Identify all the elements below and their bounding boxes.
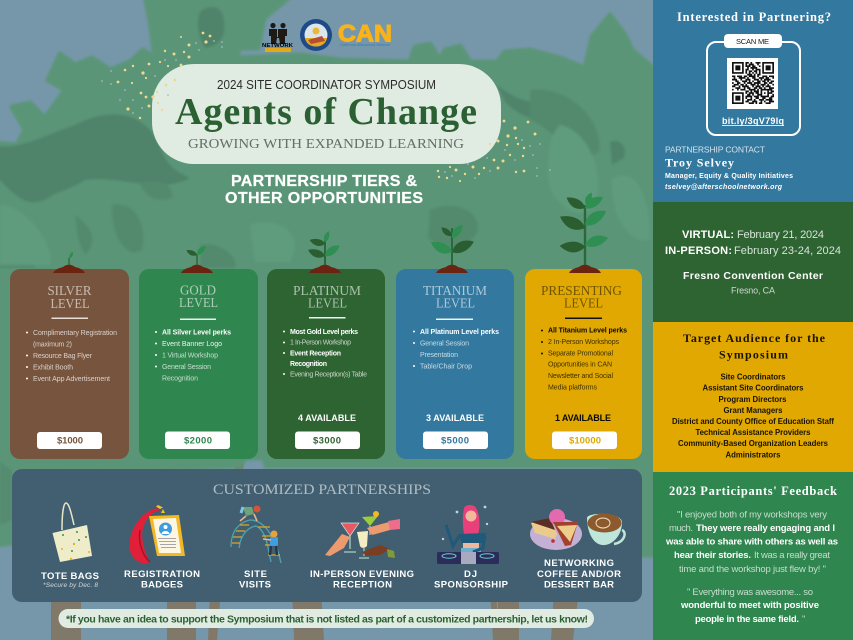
platinum price: $3000 [313,436,341,446]
heading: feedback: 2023 Participants' Feedback [669,484,837,498]
titanium perks: Table/Chair Drop [420,364,472,370]
icon: in-person evening reception toast [325,511,400,558]
audience list: Grant Managers [724,406,783,415]
presenting heading [541,283,622,310]
QR link: bit.ly/3qV79Iq [722,116,784,126]
platinum heading: PLATINUM [293,283,361,298]
quote two: people in the same field. [695,614,799,625]
silver perks: Resource Bag Flyer [33,353,93,360]
silver perks: Exhibit Booth [33,364,73,372]
icon: gold soil [181,265,213,273]
titanium heading: TITANIUM [423,283,487,298]
presenting heading: LEVEL [564,296,603,310]
platinum heading [293,283,361,310]
presenting perks: Opportunities in CAN [548,362,612,368]
silver price [37,432,102,449]
presenting heading: PRESENTING [541,283,622,298]
silver price: $1000 [57,436,83,446]
heading: partnership tiers: OTHER OPPORTUNITIES [225,190,423,207]
platinum perks: 1 In-Person Workshop [290,340,351,346]
platinum heading: LEVEL [308,296,347,310]
partnership contact: PARTNERSHIP CONTACT [665,144,765,154]
presenting perks: 2 In-Person Workshops [548,339,620,346]
heading: customized partnerships: CUSTOMIZED PARTNERSHIPS [213,482,431,498]
venue: Fresno, CA [731,286,775,296]
quote two: " [802,614,805,625]
quote two [680,587,819,625]
icon: DJ sponsorship [437,505,499,564]
background: sky and tree foliage [0,0,658,640]
heading: target audience: Symposium [719,348,788,362]
quote one: much. [669,523,693,534]
quote one: time and the workshop just flew by! " [679,564,826,575]
gold heading [179,282,218,310]
gold perks: General Session [162,364,211,371]
panel: sprout plants and soil mounds behind the tier cards [69,191,609,270]
label: DJ sponsorship [434,569,509,590]
titanium availability: 3 AVAILABLE [426,413,484,423]
callout: idea note [58,609,594,628]
label: DJ sponsorship: SPONSORSHIP [434,580,509,590]
titanium price [423,432,488,449]
quote one: was able to share with others as well as [665,536,838,548]
presenting price [552,432,617,449]
platinum availability: 4 AVAILABLE [298,413,356,423]
label: networking coffee and dessert bar: NETWORKING [544,558,614,569]
icon: CAN logo: California Afterschool Network [340,43,390,47]
icon: titanium sprout [429,223,476,268]
gold perks: Recognition [162,376,198,382]
quote one: "I enjoyed both of my workshops very [677,510,827,520]
platinum perks: Most Gold Level perks [290,329,358,336]
icon: platinum sprout [307,230,342,268]
platinum perks [283,329,367,378]
label: in-person evening reception: RECEPTION [333,580,392,590]
label: site visits: VISITS [239,580,271,590]
presenting price: $10000 [569,436,601,446]
gold perks: 1 Virtual Workshop [162,352,218,360]
gold perks: Event Banner Logo [162,341,222,348]
icon: site visits climbing children [231,506,281,563]
silver heading [48,283,92,311]
presenting availability: 1 AVAILABLE [555,413,611,423]
presenting perks: All Titanium Level perks [548,328,627,334]
quote one [665,510,838,575]
panel: silver level [10,265,129,459]
partnership contact [665,144,793,191]
audience list: Assistant Site Coordinators [702,384,804,392]
audience list: Community-Based Organization Leaders [678,439,829,448]
titanium price: $5000 [441,436,469,446]
titanium perks: Presentation [420,352,458,359]
quote one: It was a really great [754,550,830,561]
label: networking coffee and dessert bar [537,558,621,590]
heading: interested in partnering: Interested in Partnering? [677,10,831,24]
audience list: Program Directors [718,395,787,404]
panel: gold level [139,265,258,459]
presenting perks: Separate Promotional [548,350,613,358]
icon: presenting tree sprout [557,191,609,268]
gold price [165,432,230,449]
QR code [732,63,774,103]
label: networking coffee and dessert bar: DESSERT BAR [544,580,614,590]
audience list [672,372,834,460]
QR code frame [707,34,800,135]
panel: platinum level [267,265,385,459]
icon: site coordinator network logo: NETWORK [262,43,293,49]
platinum price [295,432,360,449]
in-person date: February 23-24, 2024 [734,245,841,257]
title: Agents of Change: Agents of Change [175,91,477,133]
silver perks: Complimentary Registration [33,330,117,337]
platinum perks: Evening Reception(s) Table [290,372,367,378]
label: site visits [239,569,271,590]
label: site visits: SITE [244,569,267,580]
label: in-person evening reception [310,569,414,590]
silver perks: Event App Advertisement [33,376,110,383]
platinum perks: Event Reception [290,350,341,358]
presenting perks: Media platforms [548,384,598,392]
heading: target audience: Target Audience for the [683,331,826,345]
presenting perks: Newsletter and Social [548,373,613,380]
titanium heading [423,283,487,310]
icon: silver soil [53,265,85,273]
audience list: District and County Office of Education Staff [672,417,834,426]
QR code frame: SCAN ME [736,37,769,46]
virtual date [682,229,824,241]
presenting perks [541,328,627,392]
icon: registration badge [130,505,185,563]
in-person date: IN-PERSON: [665,245,732,257]
partnership contact: tselvey@afterschoolnetwork.org [665,184,783,191]
panel: target audience [653,322,853,472]
icon: gold sprout [185,244,208,268]
callout: idea note: *If you have an idea to support the Symposium that is not listed as part of a customized partnership, let us know! [66,614,588,626]
quote two: " Everything was awesome... so [687,587,813,598]
heading: target audience [683,331,826,362]
icon: platinum soil [309,265,341,273]
sparkles: upper left cluster [101,32,223,119]
icon: tote bag [52,503,92,562]
title panel [152,64,501,164]
in-person date [665,245,841,257]
panel: participants feedback [653,472,853,640]
label: registration badges [124,569,200,590]
quote two: wonderful to meet with positive [680,600,819,611]
panel: customized partnerships [12,469,642,602]
titanium perks: General Session [420,340,469,348]
icon: state seal [300,19,332,51]
gold heading: LEVEL [179,295,218,310]
label: tote bags: TOTE BAGS [41,571,99,582]
gold heading: GOLD [180,282,216,298]
gold price: $2000 [184,436,212,446]
titanium perks [413,329,499,370]
partnership contact: Troy Selvey [665,156,734,170]
sparkles: lower right cluster [437,120,551,182]
silver heading: SILVER [48,283,92,298]
heading: partnership tiers: PARTNERSHIP TIERS & [231,173,417,190]
silver perks [26,330,117,383]
venue [683,270,823,296]
panel: titanium level [396,265,514,459]
silver heading: LEVEL [50,296,90,311]
gold perks [155,330,231,382]
gold perks: All Silver Level perks [162,330,231,336]
titanium heading: LEVEL [436,296,475,310]
audience list: Site Coordinators [720,372,786,382]
icon: desserts and coffee [530,509,625,550]
icon: silver sprout [69,252,73,270]
panel: dates and venue [653,202,853,322]
label: tote bags: *Secure by Dec. 8 [43,582,98,589]
label: registration badges: BADGES [141,580,183,590]
venue: Fresno Convention Center [683,270,823,282]
panel: presenting level [525,265,642,459]
partnership contact: Manager, Equity & Quality Initiatives [665,173,793,180]
panel: interested in partnering [653,0,853,202]
label: tote bags [41,571,99,589]
label: DJ sponsorship: DJ [464,569,477,580]
titanium perks: All Platinum Level perks [420,329,499,336]
virtual date: VIRTUAL: [682,229,734,241]
logos row [262,19,392,52]
label: networking coffee and dessert bar: COFFEE AND/OR [537,569,621,580]
platinum perks: Recognition [290,361,327,368]
virtual date: February 21, 2024 [737,229,824,241]
label: in-person evening reception: IN-PERSON EVENING [310,569,414,580]
subtitle: symposium name: 2024 SITE COORDINATOR SYMPOSIUM [217,77,436,92]
quote one: hear their stories. [674,550,751,561]
audience list: Technical Assistance Providers [696,428,811,437]
quote one: They were really engaging and I [696,523,835,534]
tagline: GROWING WITH EXPANDED LEARNING [188,136,464,151]
heading: partnership tiers [225,173,423,207]
icon: titanium soil [436,265,468,273]
icon: presenting soil [569,265,601,273]
icon: CAN logo: CAN [338,20,392,48]
silver perks: (maximum 2) [33,342,72,348]
audience list: Administrators [726,450,781,460]
label: registration badges: REGISTRATION [124,569,200,580]
